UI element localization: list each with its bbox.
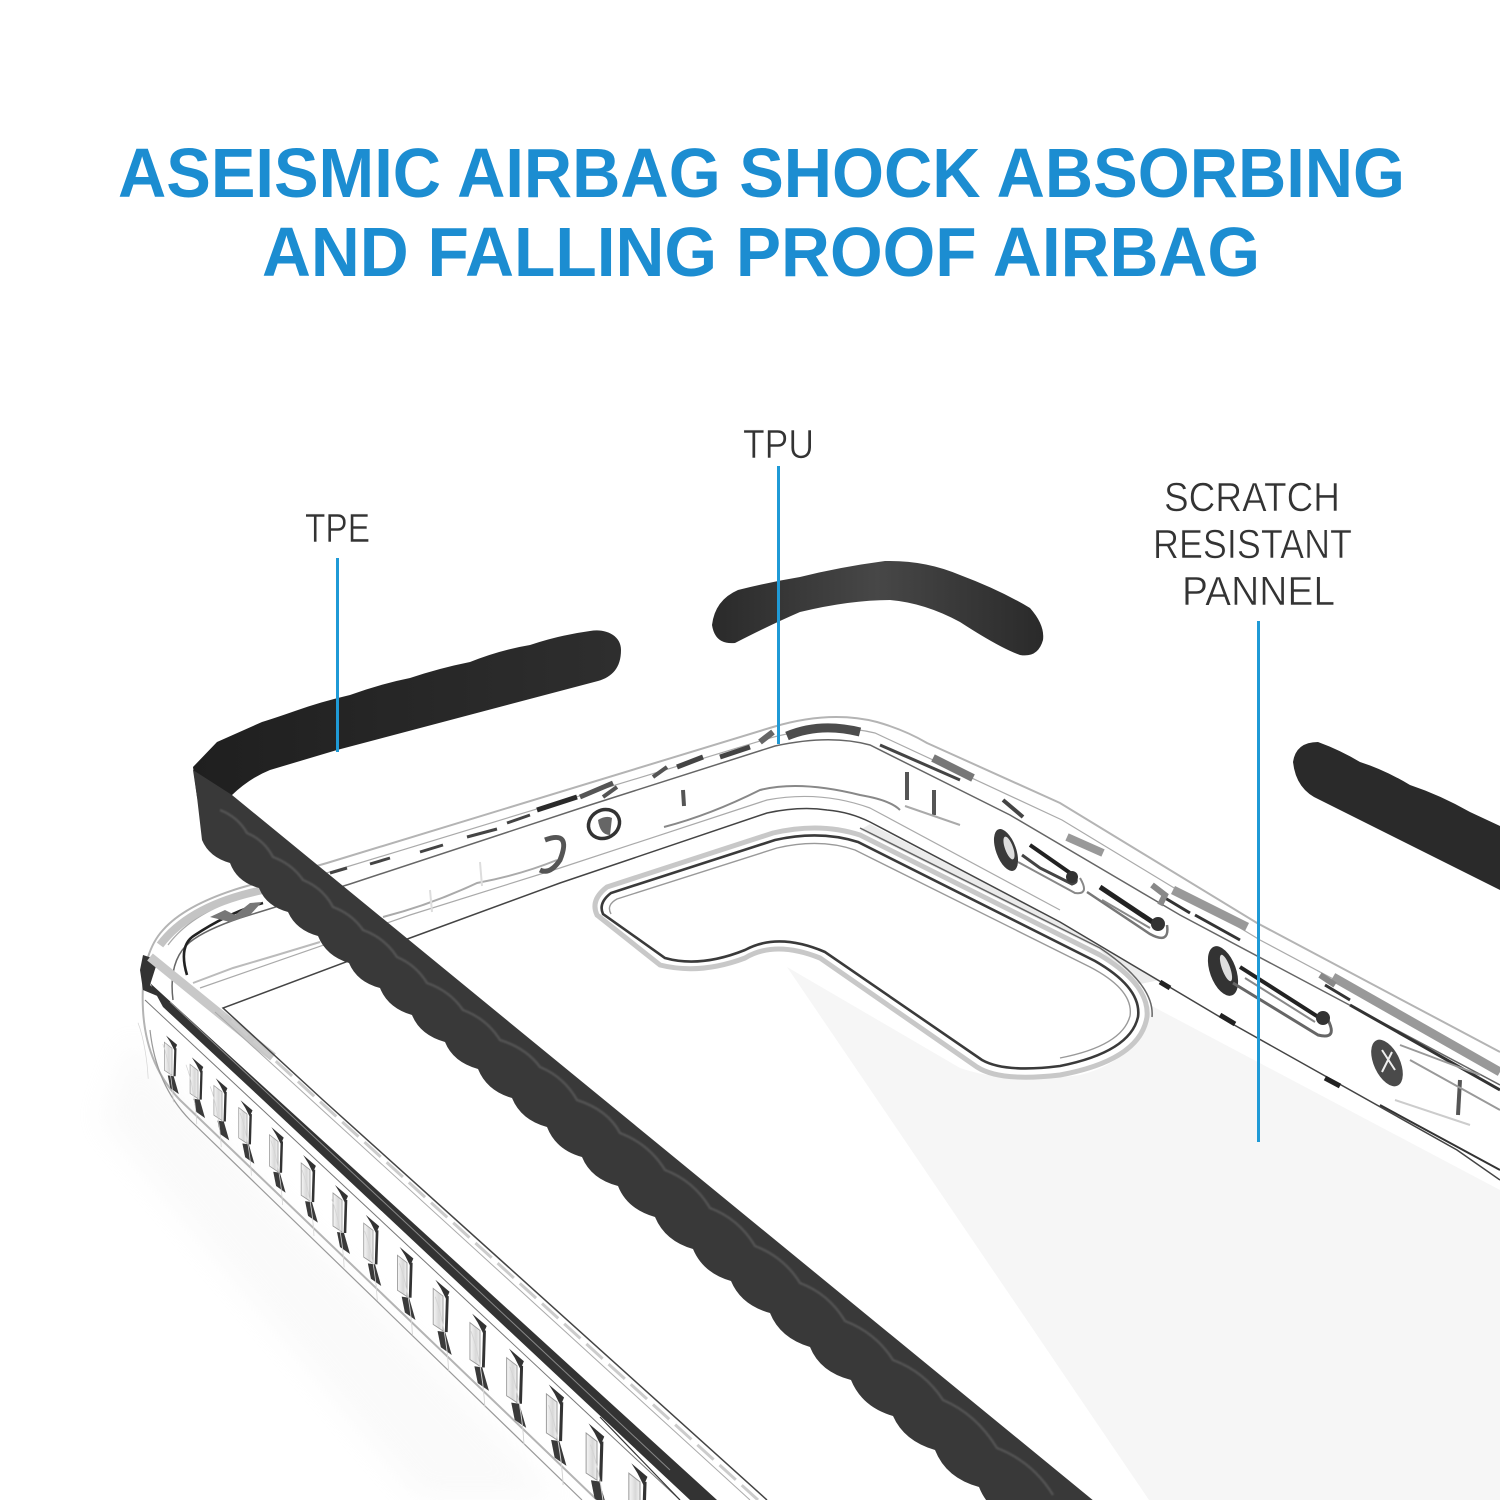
right bumper [1293, 742, 1500, 890]
top rim reflections [330, 728, 1500, 1090]
TPE bumper [193, 630, 1122, 1500]
port cutout and cell [1160, 982, 1500, 1170]
mic hole reflection [598, 817, 612, 835]
back panel light wedge [787, 967, 1500, 1500]
side button 2 [1087, 887, 1167, 938]
scratch panel leader line [1257, 621, 1260, 1142]
mic hole [583, 804, 625, 844]
scallop ridge highlights [220, 810, 1053, 1495]
corner gloss [140, 890, 320, 1057]
left rim black stripe [150, 983, 717, 1500]
TPU bumper [712, 561, 1043, 655]
TPE leader line [336, 558, 339, 752]
scalloped diagonal band [193, 770, 1122, 1500]
side button 1 [989, 826, 1084, 893]
camera cutout [595, 828, 1152, 1077]
soft shadow under case [100, 1040, 560, 1500]
side button 3 [1202, 942, 1331, 1036]
label: TPU [743, 421, 814, 744]
case outer outline [143, 717, 1500, 1500]
title: ASEISMIC AIRBAG SHOCK ABSORBING [118, 134, 1405, 212]
title [118, 134, 1405, 291]
top strip of bumper [193, 630, 621, 830]
label: scratch resistant pannel [1153, 474, 1352, 1142]
label: TPU: TPU [743, 421, 814, 467]
grey strip beside camera ridge [860, 824, 1160, 985]
label: scratch resistant pannel: PANNEL [1182, 568, 1335, 614]
title: AND FALLING PROOF AIRBAG [262, 213, 1260, 291]
label: TPE [305, 505, 370, 752]
label: scratch resistant pannel: SCRATCH [1164, 474, 1340, 520]
top rim cell highlights [383, 772, 960, 917]
label: TPE: TPE [305, 505, 370, 551]
left rim rib marks [138, 1023, 650, 1500]
left rim thin lines [145, 1000, 680, 1500]
TPU leader line [777, 466, 780, 744]
clear phone case [138, 717, 1500, 1500]
panel inner edge [200, 796, 1500, 1500]
label: scratch resistant pannel: RESISTANT [1153, 521, 1352, 567]
